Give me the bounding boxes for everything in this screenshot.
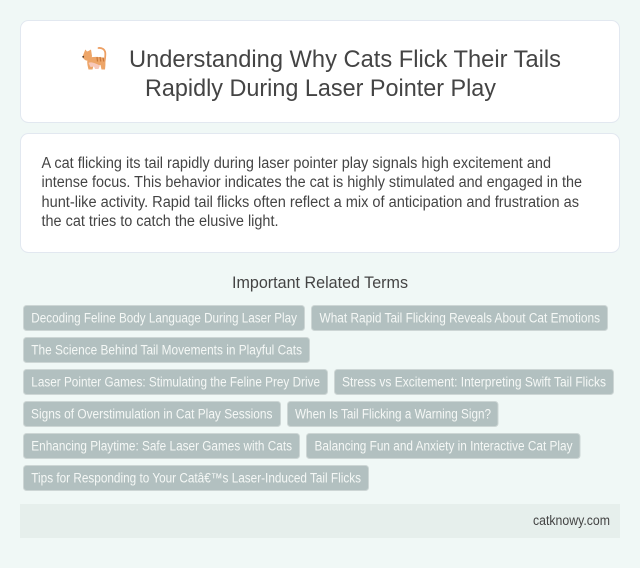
text block: description bbox=[42, 155, 582, 230]
chip: Stress vs Excitement: Interpreting Swift Tail Flicks bbox=[342, 374, 606, 390]
chip: Signs of Overstimulation in Cat Play Sessions bbox=[31, 406, 273, 422]
heading: related terms: Important Related Terms bbox=[232, 274, 408, 292]
chip bbox=[288, 402, 498, 426]
chip bbox=[24, 434, 300, 458]
chip bbox=[24, 338, 310, 362]
chip bbox=[24, 402, 280, 426]
chip: What Rapid Tail Flicking Reveals About Cat Emotions bbox=[320, 310, 600, 326]
panel: description card bbox=[20, 134, 620, 252]
text block: description: intense focus. This behavior indicates the cat is highly stimulated and engaged in the bbox=[42, 174, 582, 191]
text block: description: A cat flicking its tail rapidly during laser pointer play signals high excitement and bbox=[42, 155, 551, 172]
chip bbox=[24, 306, 304, 330]
chip: Tips for Responding to Your Catâ€™s Laser-Induced Tail Flicks bbox=[31, 470, 361, 486]
chip bbox=[312, 306, 608, 330]
chip bbox=[24, 370, 328, 394]
title: Understanding Why Cats Flick Their Tails bbox=[129, 46, 561, 73]
chip: The Science Behind Tail Movements in Playful Cats bbox=[31, 342, 302, 358]
chip: When Is Tail Flicking a Warning Sign? bbox=[295, 406, 491, 422]
footer: catknowy.com bbox=[533, 513, 610, 528]
panel: related term chips bbox=[24, 306, 614, 490]
chip: Balancing Fun and Anxiety in Interactive Cat Play bbox=[314, 438, 573, 454]
text block: description: hunt-like activity. Rapid tail flicks often reflect a mix of anticipation and frustration as bbox=[42, 194, 579, 211]
chip: Decoding Feline Body Language During Laser Play bbox=[31, 310, 297, 326]
chip bbox=[306, 434, 580, 458]
chip: Enhancing Playtime: Safe Laser Games with Cats bbox=[31, 438, 292, 454]
footer bbox=[20, 504, 620, 538]
text block: description: the cat tries to catch the elusive light. bbox=[42, 213, 278, 230]
chip bbox=[334, 370, 614, 394]
chip bbox=[24, 466, 368, 490]
title: Rapidly During Laser Pointer Play bbox=[145, 75, 497, 102]
panel: title card bbox=[20, 20, 620, 122]
chip: Laser Pointer Games: Stimulating the Feline Prey Drive bbox=[31, 374, 320, 390]
title bbox=[129, 46, 561, 102]
icon: orange cat bbox=[82, 48, 105, 70]
